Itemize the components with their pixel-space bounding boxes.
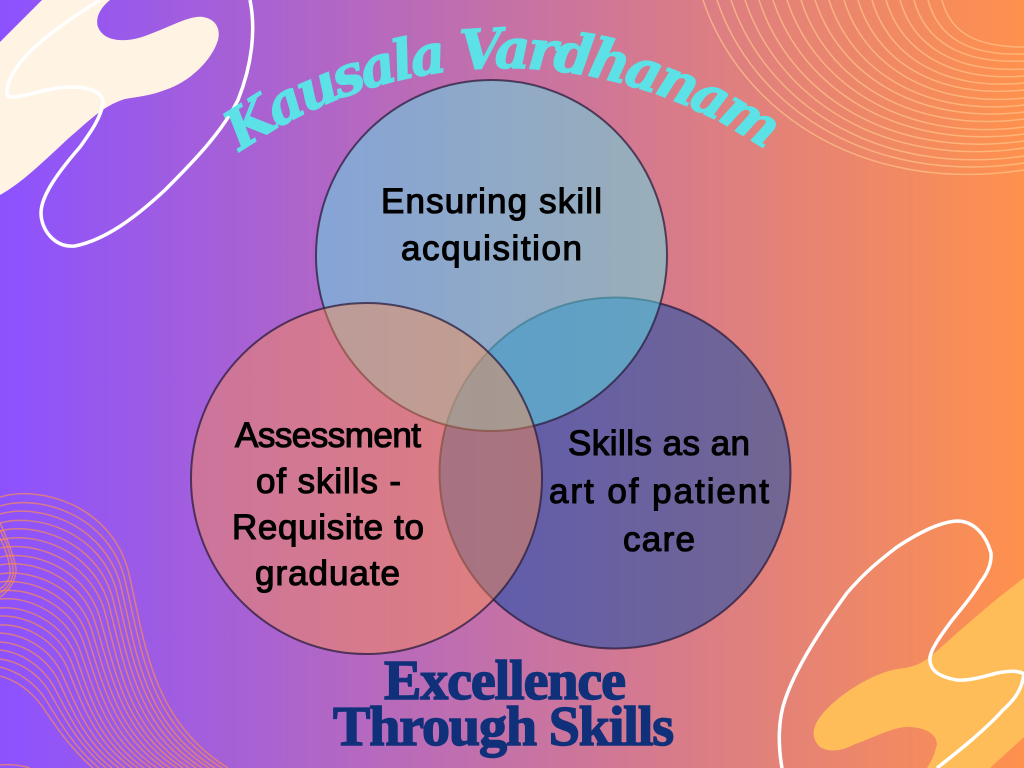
tagline: Excellence Through Skills: Excellence — [384, 650, 626, 712]
text: assessment of skills: Requisite to — [232, 508, 424, 547]
circle: skills as an art of patient care — [440, 298, 790, 648]
decoration: top-right contour lines — [703, 0, 1024, 174]
text: assessment of skills: Assessment — [235, 416, 421, 455]
text: skills as an art of patient care: Skills as an — [568, 424, 750, 463]
text: ensuring skill acquisition — [381, 182, 602, 268]
circle: assessment of skills — [191, 303, 542, 654]
text: ensuring skill acquisition: acquisition — [401, 229, 582, 268]
venn diagram — [191, 80, 790, 654]
decoration: bottom-right yellow blob — [814, 578, 1024, 768]
circle: ensuring skill acquisition — [316, 80, 667, 431]
decoration: bottom-right white outline — [779, 521, 1024, 768]
tagline: Excellence Through Skills — [333, 650, 674, 758]
text: assessment of skills: of skills - — [256, 462, 401, 501]
text: skills as an art of patient care: art of patient — [549, 472, 769, 511]
text: ensuring skill acquisition: Ensuring skill — [381, 182, 602, 221]
decoration: top-left white outline — [7, 0, 253, 246]
text: assessment of skills: graduate — [255, 554, 400, 593]
tagline: Excellence Through Skills: Through Skills — [333, 696, 674, 758]
title: Kausala Vardhanam: Kausala Vardhanam — [223, 26, 776, 154]
decoration: top-left cream blob — [0, 0, 219, 195]
text: skills as an art of patient care — [549, 424, 769, 559]
text: assessment of skills — [232, 416, 424, 593]
decoration: bottom-left contour lines — [0, 494, 228, 768]
text: skills as an art of patient care: care — [623, 520, 695, 559]
